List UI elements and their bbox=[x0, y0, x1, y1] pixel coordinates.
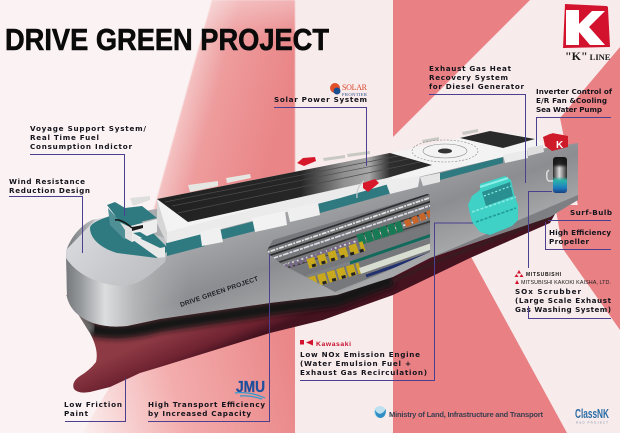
funnel K bbox=[543, 129, 568, 151]
label: sox scrubber: MITSUBISHI KAKOKI KAISHA, LTD. bbox=[521, 280, 611, 286]
label: propeller bbox=[546, 222, 611, 250]
label: propeller: Propeller bbox=[549, 237, 589, 246]
teal gutter strips bbox=[166, 157, 503, 256]
label: sox scrubber: Gas Washing System) bbox=[515, 305, 611, 314]
deck top blocks bbox=[188, 181, 218, 192]
label: wind resistance: Reduction Design bbox=[9, 186, 90, 195]
red deck unit forward bbox=[357, 179, 379, 198]
label: low friction bbox=[64, 378, 126, 422]
bow teal deck bbox=[90, 215, 170, 258]
bow metallic sheen bbox=[60, 195, 578, 330]
ship bbox=[60, 129, 578, 393]
label: exhaust gas: Recovery System bbox=[429, 73, 508, 82]
logo: solar frontier: FRONTIER bbox=[342, 92, 368, 97]
logo: solar frontier: SOLAR bbox=[342, 83, 368, 92]
upper hull gray bbox=[66, 143, 578, 327]
K Line logo: "K"LINE bbox=[565, 49, 611, 63]
ship name: DRIVE GREEN PROJECT bbox=[179, 276, 259, 309]
label: low nox bbox=[300, 223, 473, 380]
label: low nox: Exhaust Gas Recirculation) bbox=[300, 368, 427, 377]
logo: ministry bbox=[374, 406, 543, 419]
label: high transport: by Increased Capacity bbox=[148, 409, 251, 418]
lower hull red bbox=[66, 205, 560, 393]
logo: JMU: JMU bbox=[236, 379, 265, 396]
label: wind resistance bbox=[9, 177, 90, 253]
label: low nox: (Water Emulsion Fuel + bbox=[300, 359, 411, 368]
label: voyage support: Voyage Support System/ bbox=[30, 124, 146, 133]
logo: ministry: Ministry of Land, Infrastructure and Transport bbox=[389, 410, 543, 419]
label: inverter control: Inverter Control of bbox=[536, 87, 613, 96]
label: solar power: Solar Power System bbox=[274, 95, 367, 104]
bridge bbox=[107, 196, 165, 258]
logo: classnk: R&D PROJECT bbox=[576, 420, 608, 424]
engine bbox=[468, 176, 518, 235]
logo: solar frontier bbox=[330, 83, 368, 97]
label: sox scrubber: MITSUBISHI bbox=[526, 272, 562, 278]
white main deck bbox=[157, 131, 544, 243]
label: exhaust gas: for Diesel Generator bbox=[429, 82, 524, 91]
scrubber bbox=[547, 157, 567, 193]
hatch blocks bbox=[200, 227, 223, 246]
helipad bbox=[412, 140, 478, 162]
label: low nox: Kawasaki bbox=[316, 341, 351, 348]
funnel K: K bbox=[556, 140, 564, 151]
label: surf-bulb bbox=[548, 208, 612, 220]
label: exhaust gas bbox=[429, 64, 526, 183]
label: inverter control bbox=[536, 87, 613, 146]
car deck cutaway bbox=[266, 194, 430, 293]
dark waterline band bbox=[70, 218, 550, 332]
label: low friction: Low Friction bbox=[64, 400, 122, 409]
label: low nox: Low NOx Emission Engine bbox=[300, 350, 420, 359]
logo: classnk bbox=[575, 407, 609, 424]
title: DRIVE GREEN PROJECT bbox=[5, 22, 329, 57]
label: propeller: High Efficiency bbox=[549, 228, 611, 237]
label: surf-bulb: Surf-Bulb bbox=[570, 208, 612, 217]
solar panel aft bbox=[460, 131, 535, 148]
label: sox scrubber bbox=[514, 192, 612, 318]
label: voyage support bbox=[30, 124, 146, 216]
label: sox scrubber: (Large Scale Exhaust bbox=[515, 296, 612, 305]
label: low friction: Paint bbox=[64, 409, 89, 418]
label: high transport: High Transport Efficiency bbox=[148, 400, 265, 409]
label: wind resistance: Wind Resistance bbox=[9, 177, 85, 186]
label: solar power bbox=[274, 95, 367, 166]
K Line logo bbox=[563, 4, 611, 63]
label: sox scrubber: SOx Scrubber bbox=[515, 287, 581, 296]
label: inverter control: E/R Fan &Cooling bbox=[536, 96, 607, 105]
label: voyage support: Real Time Fuel bbox=[30, 133, 99, 142]
label: voyage support: Consumption Indictor bbox=[30, 142, 132, 151]
label: high transport bbox=[148, 254, 270, 422]
label: inverter control: Sea Water Pump bbox=[536, 105, 602, 114]
solar panel forward bbox=[157, 153, 432, 222]
label: exhaust gas: Exhaust Gas Heat bbox=[429, 64, 512, 73]
